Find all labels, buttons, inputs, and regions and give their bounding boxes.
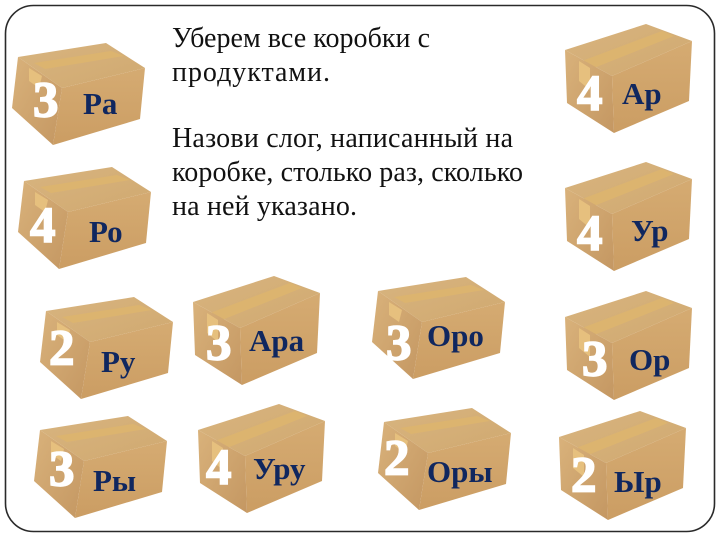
box: 3 Ра: Ра bbox=[83, 86, 118, 121]
box: 3 Ор: Ор bbox=[629, 342, 670, 377]
box: 2 Ру: Ру bbox=[101, 344, 136, 379]
box: 2 Оры: 2 bbox=[384, 431, 410, 487]
box: 3 Оро: 3 bbox=[386, 316, 412, 372]
box: 4 Ар: Ар bbox=[622, 76, 662, 111]
box: 3 Ра: 3 bbox=[33, 73, 58, 129]
box: 4 Уру bbox=[198, 404, 325, 513]
box: 3 Ара bbox=[193, 276, 320, 385]
box: 4 Ро: 4 bbox=[30, 198, 56, 254]
box: 2 Ыр: Ыр bbox=[614, 464, 662, 499]
box: 4 Ар: 4 bbox=[577, 66, 602, 122]
box: 2 Ыр bbox=[559, 411, 686, 520]
box: 3 Ор bbox=[565, 291, 692, 400]
box: 2 Ру bbox=[40, 297, 173, 399]
box: 4 Уру: 4 bbox=[206, 440, 232, 496]
box: 4 Ро bbox=[18, 167, 151, 269]
box: 3 Ара: Ара bbox=[249, 323, 305, 358]
box: 4 Ур bbox=[565, 162, 692, 271]
box: 3 Ра bbox=[12, 43, 145, 145]
box: 4 Уру: Уру bbox=[253, 451, 306, 486]
instruction text: коробке, столько раз, сколько bbox=[172, 157, 523, 188]
instruction text: на ней указано. bbox=[172, 191, 357, 222]
box: 2 Оры: Оры bbox=[427, 454, 493, 489]
box: 3 Ара: 3 bbox=[206, 316, 232, 372]
box: 4 Ур: 4 bbox=[577, 206, 602, 262]
box: 3 Оро: Оро bbox=[427, 318, 484, 353]
instruction text bbox=[172, 23, 523, 222]
box: 4 Ро: Ро bbox=[89, 214, 123, 249]
box: 2 Оры bbox=[378, 408, 511, 510]
box: 3 Ры bbox=[34, 416, 167, 518]
box: 3 Ры: 3 bbox=[49, 442, 74, 498]
box: 3 Оро bbox=[372, 277, 505, 379]
box: 2 Ыр: 2 bbox=[571, 448, 596, 504]
instruction text: Уберем все коробки с bbox=[172, 23, 430, 54]
instruction text: Назови слог, написанный на bbox=[172, 123, 514, 154]
box: 3 Ор: 3 bbox=[582, 332, 608, 388]
box: 3 Ры: Ры bbox=[93, 463, 136, 498]
box: 4 Ар bbox=[565, 24, 692, 133]
box: 2 Ру: 2 bbox=[49, 321, 74, 377]
instruction text: продуктами. bbox=[172, 57, 330, 88]
box: 4 Ур: Ур bbox=[631, 213, 668, 248]
